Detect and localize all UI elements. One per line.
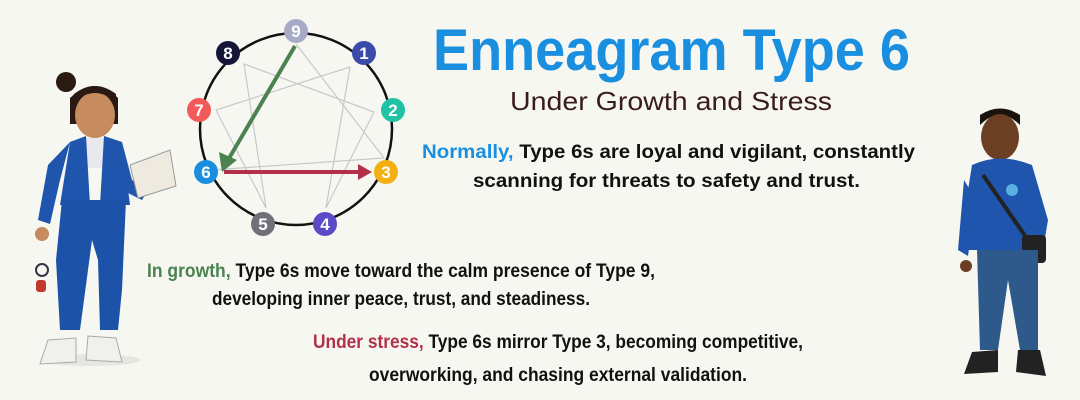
- nodes: 5: [258, 215, 268, 234]
- nodes: [187, 19, 405, 236]
- text: stress: [313, 332, 803, 386]
- nodes: 7: [194, 101, 204, 120]
- text: stress: Under stress, Type 6s mirror Type 3, becoming competitive,: [313, 332, 803, 353]
- text: normally: Normally, Type 6s are loyal and vigilant, constantly: [422, 142, 915, 163]
- nodes: 4: [320, 215, 330, 234]
- inner lines: [212, 44, 384, 208]
- text: growth: [147, 261, 655, 310]
- subtitle: Under Growth and Stress: [510, 86, 832, 116]
- text: growth: developing inner peace, trust, and steadiness.: [212, 289, 590, 310]
- character: man with bag: [958, 108, 1048, 376]
- enneagram diagram: [187, 19, 405, 236]
- nodes: 9: [291, 22, 301, 41]
- nodes: 8: [223, 44, 233, 63]
- nodes: 2: [388, 101, 398, 120]
- nodes: 1: [359, 44, 369, 63]
- title: Enneagram Type 6: [433, 18, 910, 83]
- nodes: 3: [381, 163, 391, 182]
- text: stress: overworking, and chasing external validation.: [369, 365, 747, 386]
- arrow: stress 6 to 3: [224, 164, 372, 180]
- text: normally: [422, 142, 915, 192]
- text: normally: scanning for threats to safety and trust.: [473, 171, 860, 192]
- nodes: 6: [201, 163, 211, 182]
- arrow: growth 6 to 9: [219, 46, 295, 172]
- text: growth: In growth, Type 6s move toward the calm presence of Type 9,: [147, 261, 655, 282]
- character: woman with map: [35, 72, 176, 366]
